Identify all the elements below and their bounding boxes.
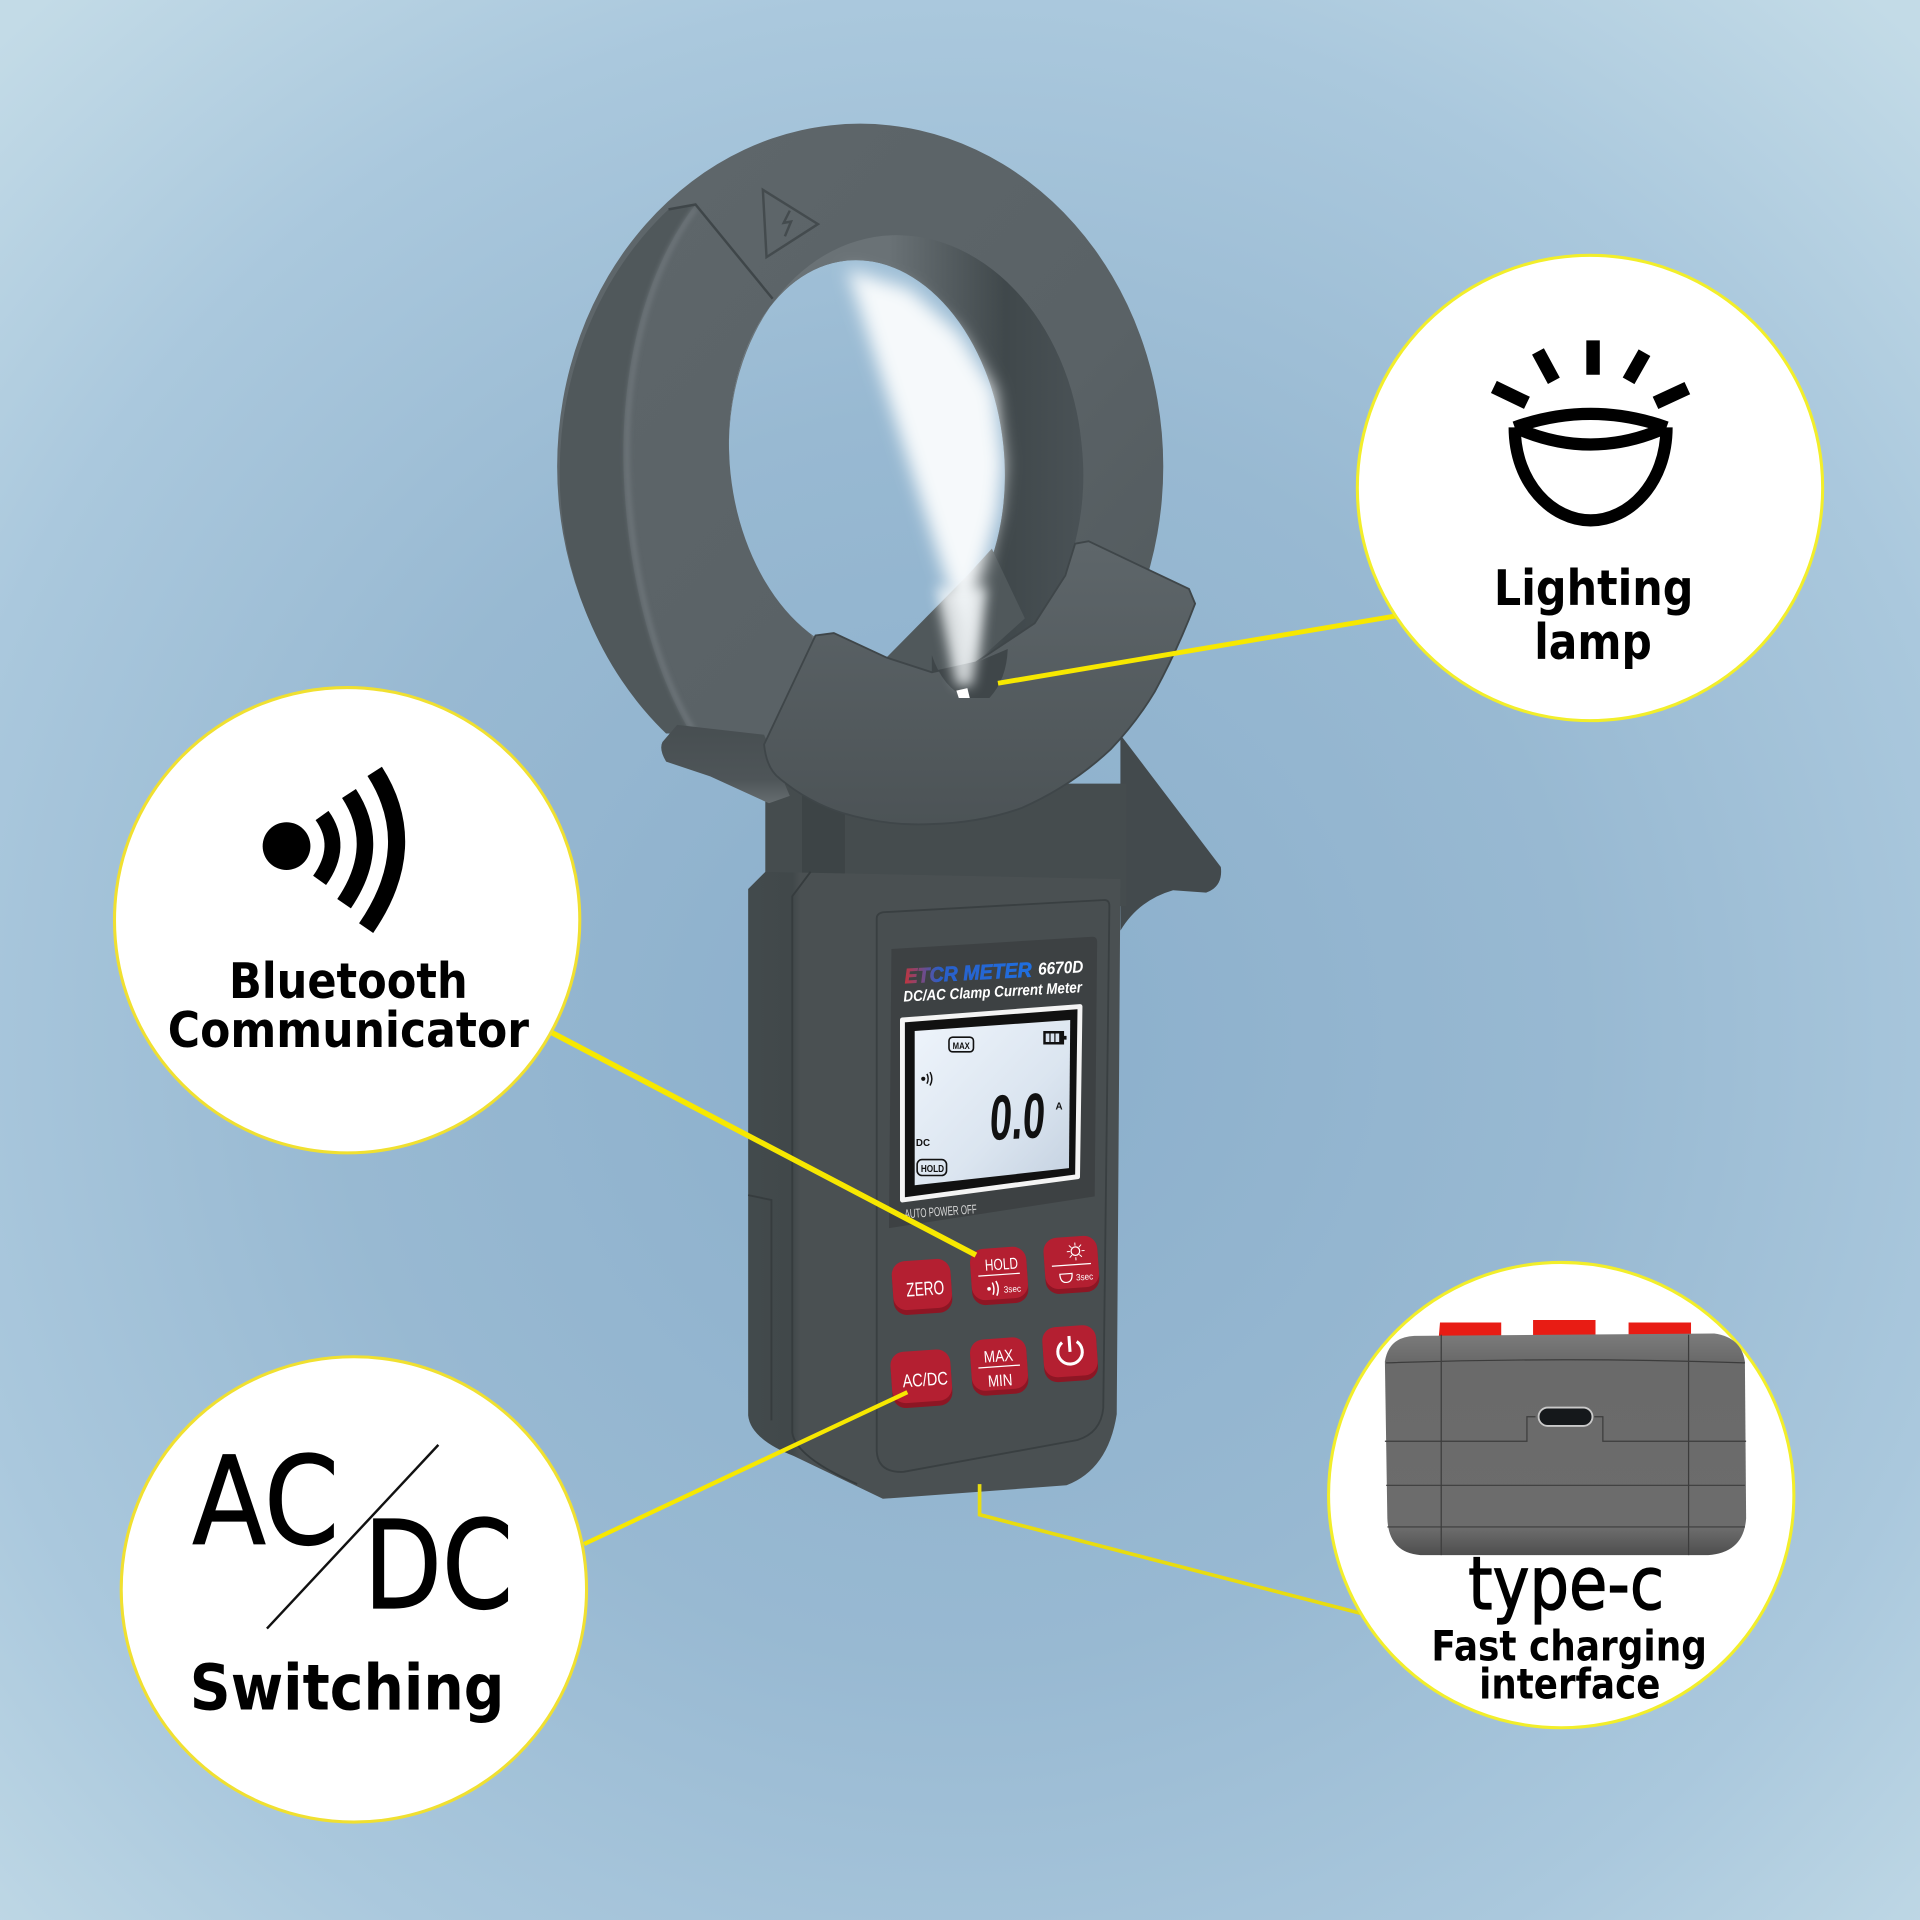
button: power xyxy=(1041,1324,1099,1383)
device: body shell xyxy=(748,872,1120,1499)
text: switching: Switching xyxy=(190,1651,504,1725)
icon: hazard triangle xyxy=(763,190,818,257)
device: lamp LED xyxy=(956,688,970,698)
button: light: 3sec xyxy=(1076,1271,1094,1283)
text: bluetooth: Bluetooth xyxy=(229,953,468,1010)
text: type-c: type-c xyxy=(1468,1542,1664,1627)
slash xyxy=(267,1445,438,1629)
device: beam glow at lamp xyxy=(936,588,987,686)
button: MAX MIN xyxy=(969,1336,1029,1397)
text: fast charging: Fast charging xyxy=(1431,1621,1707,1670)
text: lamp: lamp xyxy=(1534,614,1652,671)
device: neck xyxy=(765,784,1127,906)
panel: lighting lamp xyxy=(1357,255,1823,721)
device: front panel xyxy=(877,900,1109,1472)
callout line: AC/DC xyxy=(584,1392,907,1544)
device: right fin behind body xyxy=(1120,735,1221,931)
clamp meter device xyxy=(557,124,1221,1499)
button: HOLD: 3sec xyxy=(1003,1284,1022,1295)
device: model number: 6670D xyxy=(1038,956,1084,979)
button: ZERO xyxy=(891,1258,953,1316)
device: LCD readouts: A xyxy=(1056,1101,1063,1112)
button: AC/DC xyxy=(890,1349,953,1409)
button: HOLD xyxy=(969,1246,1029,1306)
text: communicator: Communicator xyxy=(168,1002,529,1059)
device: LCD readouts: DC xyxy=(916,1138,930,1149)
device: ring inner wall xyxy=(729,235,1083,688)
callout line: type-c xyxy=(980,1484,1363,1614)
icon: meter base with type-c port xyxy=(1385,1320,1746,1555)
callout line: lamp xyxy=(998,616,1396,683)
button: HOLD: HOLD xyxy=(984,1255,1019,1275)
text: AC: AC xyxy=(192,1430,339,1573)
button: MAX MIN: MAX xyxy=(983,1346,1014,1367)
device: LCD readouts xyxy=(916,1031,1067,1176)
panel: AC/DC switching xyxy=(121,1357,587,1822)
device: lower clamp jaw xyxy=(764,541,1195,824)
device: lower left jaw hinge xyxy=(661,725,790,803)
button: MAX MIN: MIN xyxy=(987,1370,1013,1391)
device: ring seam xyxy=(669,204,773,299)
device: LCD readouts: 0.0 xyxy=(988,1080,1046,1154)
icon: lamp xyxy=(1494,340,1687,520)
device: side seam xyxy=(748,872,857,1484)
text: lighting: Lighting xyxy=(1494,560,1693,617)
device: LCD xyxy=(915,1020,1070,1185)
device: jaw tray xyxy=(887,549,1025,672)
device: ring front face xyxy=(557,124,1164,739)
device: ring highlight ridge xyxy=(627,208,696,730)
device: brand logo: ETCR METER xyxy=(904,959,1032,988)
panel: bluetooth xyxy=(114,688,580,1153)
button: light xyxy=(1043,1235,1100,1295)
callout line: bluetooth xyxy=(551,1032,976,1255)
device: neck shading xyxy=(802,796,845,884)
device: auto power off text: AUTO POWER OFF xyxy=(904,1201,977,1221)
text: DC: DC xyxy=(364,1494,513,1637)
panel: type-c xyxy=(1329,1262,1794,1728)
device: clamp ring xyxy=(557,124,1164,739)
button: ZERO: ZERO xyxy=(906,1277,945,1302)
device: LCD readouts: HOLD xyxy=(921,1164,944,1175)
device: ring left shell xyxy=(560,204,696,735)
device: LCD readouts: MAX xyxy=(953,1041,971,1051)
device: product name: DC/AC Clamp Current Meter xyxy=(903,979,1083,1006)
icon: wireless signal xyxy=(263,771,397,928)
device: label plate xyxy=(889,937,1097,1228)
device: light beam xyxy=(847,269,1003,688)
text: interface: interface xyxy=(1479,1659,1660,1708)
device: screen frame xyxy=(902,1007,1080,1200)
device: lamp recess xyxy=(932,649,1008,698)
button: AC/DC: AC/DC xyxy=(902,1367,948,1391)
